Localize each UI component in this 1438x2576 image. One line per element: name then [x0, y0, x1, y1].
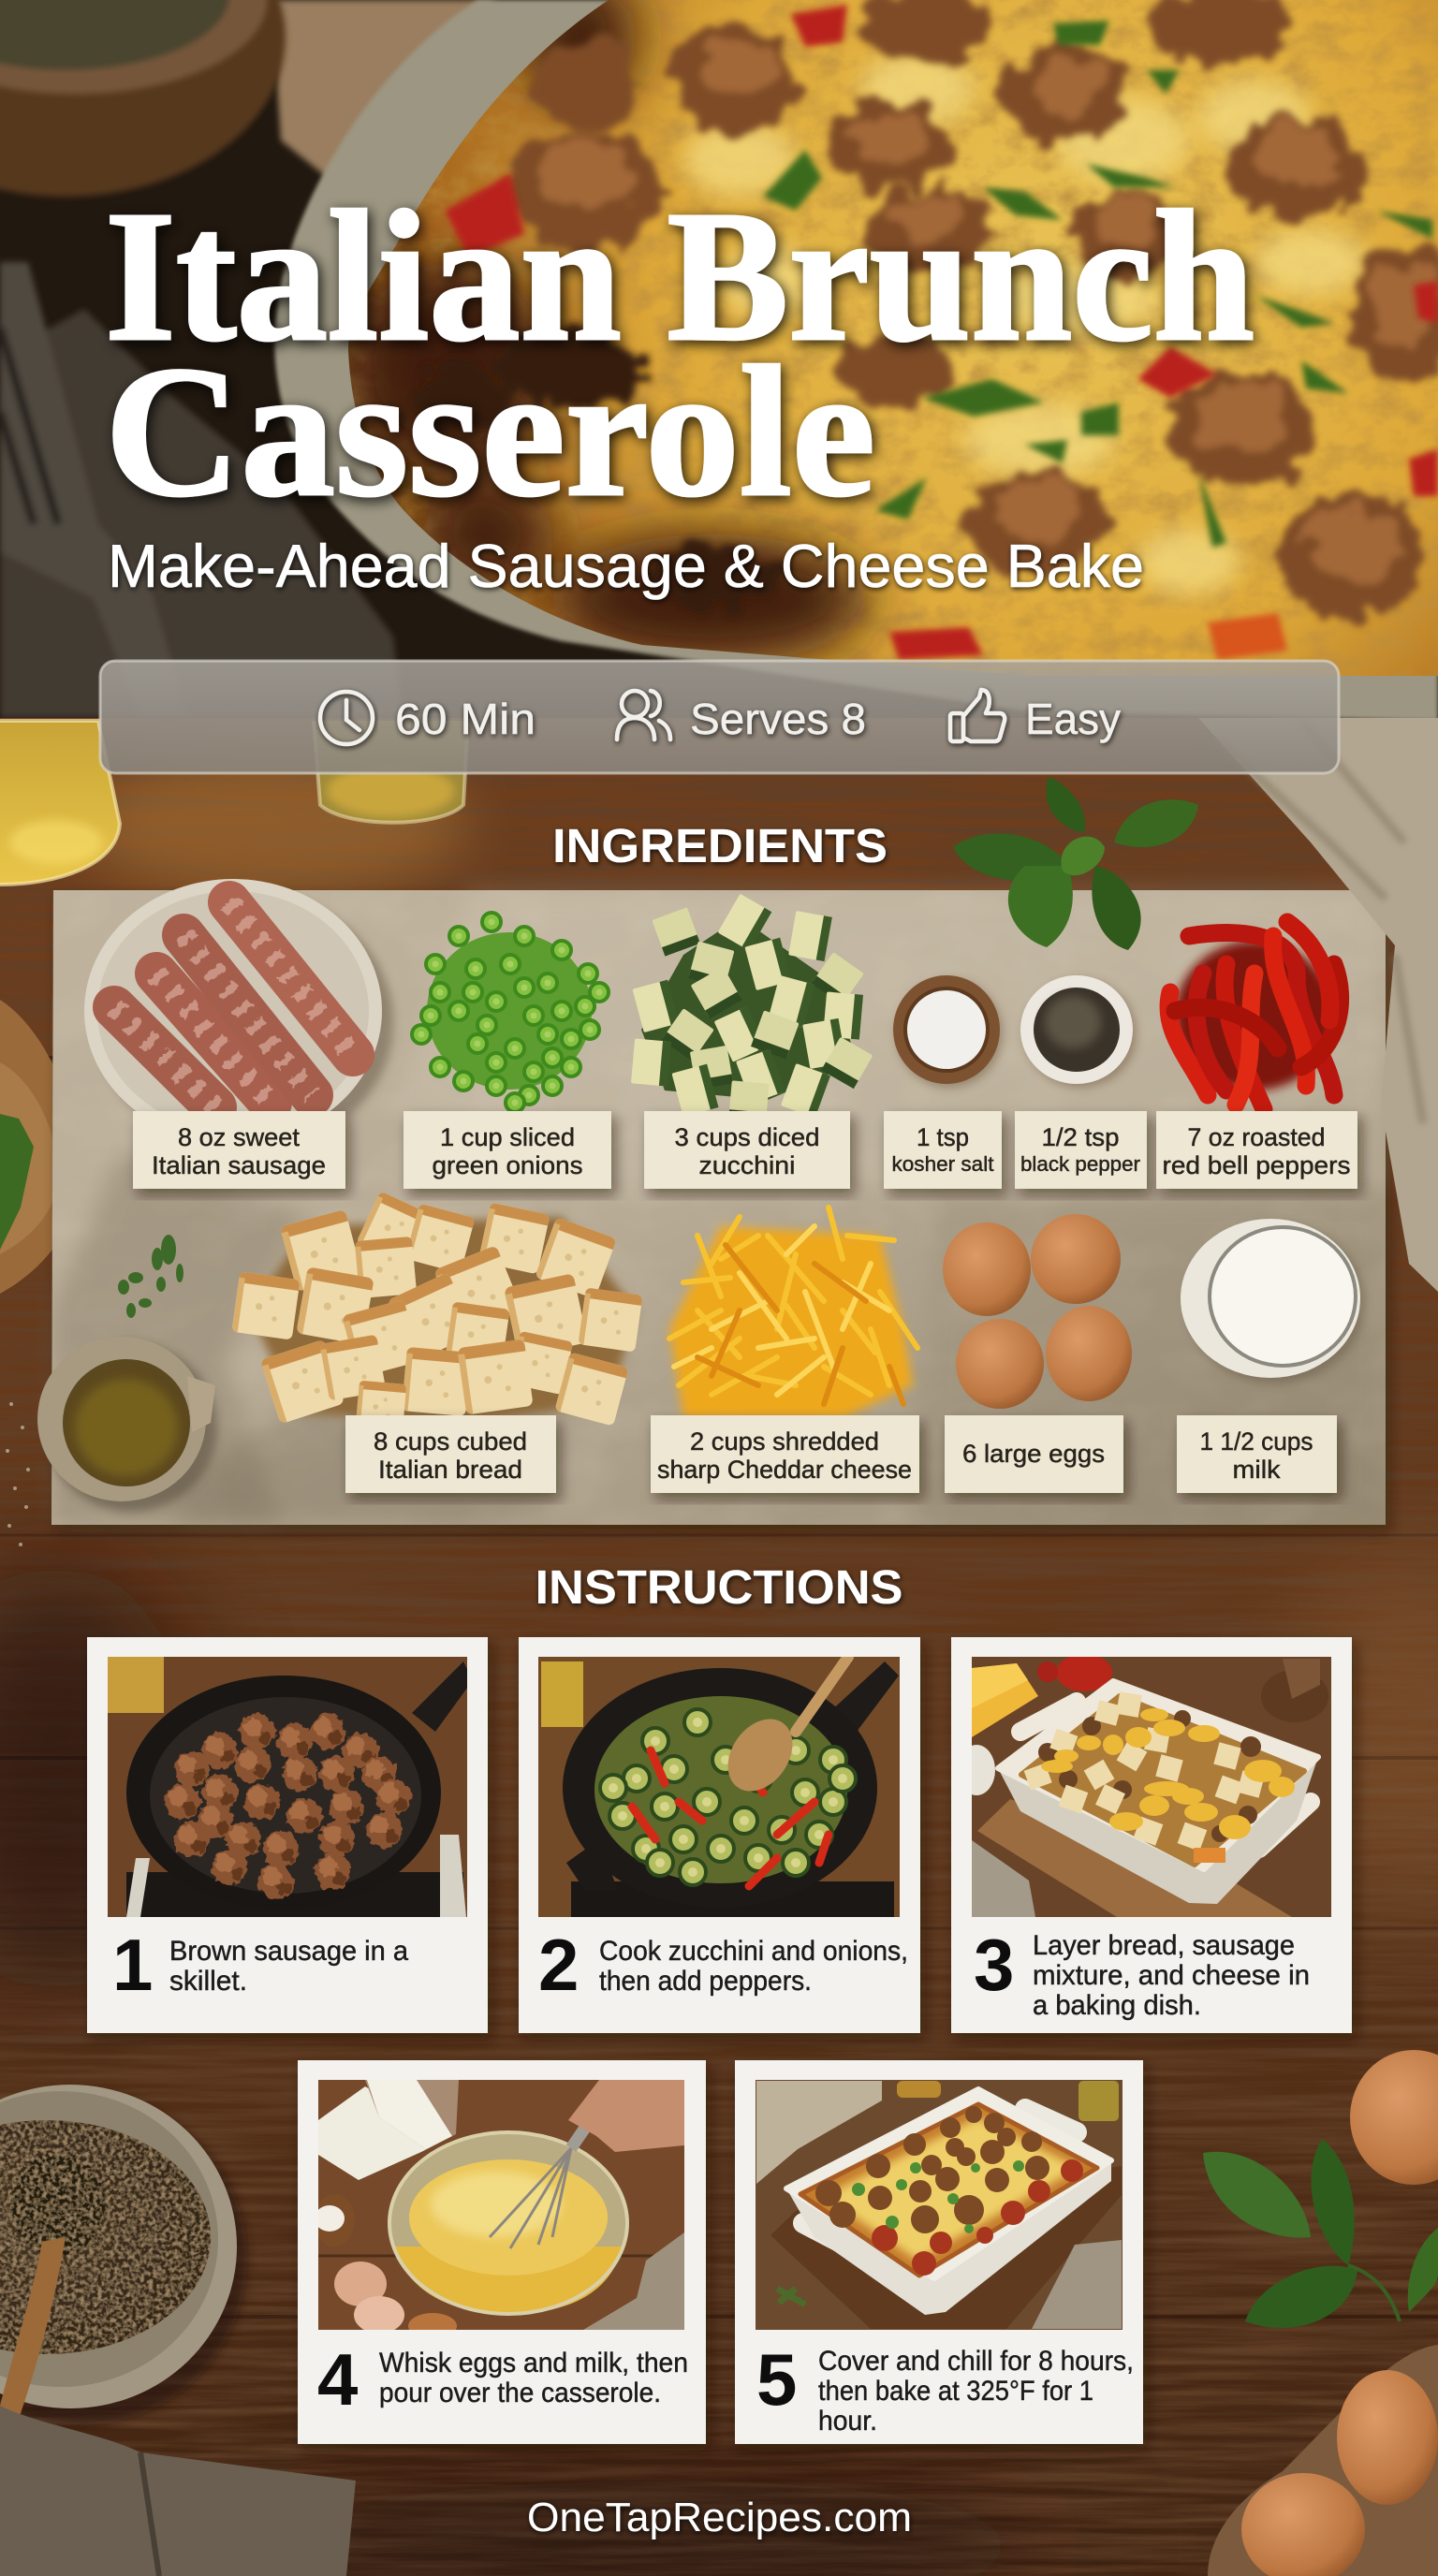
number 5: 5 — [756, 2338, 797, 2421]
step 2 text — [599, 1936, 908, 1997]
label: kosher salt — [884, 1111, 1002, 1189]
step 2 card — [519, 1637, 920, 2033]
ingredient: sausages on plate — [84, 879, 393, 1153]
icon: basil sprig top — [953, 777, 1198, 950]
label: bread: 8 cups cubed — [374, 1427, 527, 1456]
ingredient: diced zucchini — [631, 894, 873, 1122]
label: black pepper — [1015, 1111, 1147, 1189]
ingredient: roasted red peppers — [1168, 922, 1341, 1109]
ingredient: shredded cheddar — [669, 1208, 917, 1418]
ingredient: glass of milk — [1181, 1219, 1365, 1383]
stat: difficulty: Easy — [1025, 695, 1121, 743]
step 1 card — [87, 1637, 488, 2033]
step 3 text: Layer bread, sausage — [1033, 1930, 1295, 1961]
linen cloth right — [1198, 718, 1438, 1292]
decorative seed bowl — [0, 2085, 247, 2471]
icon: wooden bowl — [0, 0, 286, 197]
step 4 text — [379, 2348, 688, 2408]
title: Casserole — [105, 329, 875, 535]
photo: browning sausage — [108, 1657, 473, 1917]
small scattered herbs — [118, 1235, 183, 1318]
label: milk — [1177, 1415, 1337, 1493]
photo: whisking eggs and milk — [314, 2080, 684, 2339]
icon: thumbs up — [950, 690, 1005, 741]
label: zucchini: zucchini — [698, 1151, 796, 1179]
label: black pepper: 1/2 tsp — [1041, 1123, 1120, 1151]
recipe stats bar — [100, 661, 1339, 773]
label: green onions: green onions — [433, 1151, 582, 1179]
step 3 text — [1033, 1930, 1310, 2021]
label: green onions: 1 cup sliced — [440, 1123, 575, 1151]
label: eggs — [945, 1415, 1123, 1493]
ingredient: large eggs — [943, 1214, 1132, 1409]
label: kosher salt: kosher salt — [891, 1152, 994, 1176]
label: bread — [345, 1415, 556, 1493]
wooden bowl at left edge — [0, 1000, 80, 1294]
step 1 text — [169, 1936, 408, 1997]
footer website: OneTapRecipes.com — [527, 2495, 912, 2540]
ingredient: green onions — [412, 913, 609, 1112]
number 4: 4 — [317, 2338, 358, 2421]
step 4 card — [298, 2060, 706, 2444]
heading: ingredients: INGREDIENTS — [552, 819, 888, 872]
label: sausage: 8 oz sweet — [178, 1123, 300, 1151]
photo: layered casserole dish — [958, 1654, 1331, 1917]
label: green onions — [404, 1111, 611, 1189]
subtitle: Make-Ahead Sausage & Cheese Bake — [108, 532, 1144, 600]
ingredient: cubed Italian bread — [231, 1191, 643, 1431]
step 3 text: mixture, and cheese in — [1033, 1960, 1310, 1991]
photo: baked casserole — [756, 2080, 1123, 2330]
olive oil glass left — [0, 721, 120, 885]
step 5 text: then bake at 325°F for 1 — [818, 2376, 1093, 2407]
label: zucchini — [644, 1111, 850, 1189]
label: zucchini: 3 cups diced — [674, 1123, 820, 1151]
icon: wooden spoon — [0, 2153, 105, 2471]
label: milk: 1 1/2 cups — [1200, 1427, 1313, 1456]
step 5 card — [735, 2060, 1143, 2444]
napkin and fork — [0, 262, 403, 718]
number 3: 3 — [974, 1924, 1014, 2006]
step 4 text: Whisk eggs and milk, then — [379, 2348, 688, 2378]
top background wood — [271, 0, 496, 178]
ingredient: pepper bowl — [1020, 975, 1137, 1088]
label: red peppers: red bell peppers — [1163, 1151, 1350, 1179]
icon: clock — [320, 692, 373, 744]
dark shaded corner — [346, 0, 871, 665]
step 4 text: pour over the casserole. — [379, 2378, 661, 2408]
label: red peppers — [1156, 1111, 1357, 1189]
olive oil glass second — [314, 721, 468, 823]
green herbs — [763, 21, 1432, 548]
label: bread: Italian bread — [378, 1456, 522, 1484]
hero photo of casserole — [0, 0, 1438, 721]
step 2 text: Cook zucchini and onions, — [599, 1936, 908, 1967]
glasses below hero — [0, 721, 468, 885]
heading: instructions: INSTRUCTIONS — [536, 1560, 902, 1614]
label: sausage: Italian sausage — [152, 1151, 326, 1179]
section: ingredient mat — [51, 890, 1386, 1525]
title: Italian Brunch — [105, 173, 1255, 380]
pale cheese highlights — [683, 51, 1367, 594]
casserole filling — [348, 0, 1438, 676]
number 1: 1 — [112, 1924, 153, 2006]
ingredient: broth cup — [37, 1337, 217, 1512]
step 3 card — [951, 1637, 1352, 2033]
step 3 text: a baking dish. — [1033, 1990, 1201, 2021]
coarse salt speckles — [6, 1402, 30, 1546]
step 5 text: hour. — [818, 2406, 877, 2437]
decorative egg right — [1350, 2050, 1438, 2185]
step 5 text — [818, 2346, 1134, 2437]
label: cheddar: sharp Cheddar cheese — [657, 1456, 912, 1484]
stat: servings: Serves 8 — [690, 695, 866, 743]
label: red peppers: 7 oz roasted — [1187, 1123, 1326, 1151]
decorative napkin bottom left — [0, 2406, 356, 2576]
ingredient labels — [133, 1111, 1357, 1493]
stat: time: 60 Min — [395, 695, 536, 743]
step 2 text: then add peppers. — [599, 1966, 812, 1997]
label: sausage — [133, 1111, 345, 1189]
label: cheddar — [651, 1415, 919, 1493]
photo: zucchini and peppers in skillet — [538, 1657, 900, 1917]
ingredient: salt bowl — [893, 975, 1003, 1088]
step 5 text: Cover and chill for 8 hours, — [818, 2346, 1134, 2377]
decorative egg carton — [1208, 2345, 1438, 2576]
step 1 text: skillet. — [169, 1966, 247, 1997]
label: black pepper: black pepper — [1020, 1152, 1140, 1176]
label: eggs: 6 large eggs — [962, 1440, 1105, 1468]
number 2: 2 — [538, 1924, 579, 2006]
label: kosher salt: 1 tsp — [917, 1123, 969, 1151]
icon: people — [617, 691, 670, 739]
label: milk: milk — [1232, 1456, 1281, 1484]
step 1 text: Brown sausage in a — [169, 1936, 408, 1967]
baking dish rim — [274, 0, 1438, 721]
title — [105, 173, 1255, 535]
red peppers — [445, 5, 1438, 660]
decorative basil right — [1203, 2139, 1438, 2328]
sausage crumbles — [407, 0, 1438, 619]
label: cheddar: 2 cups shredded — [690, 1427, 879, 1456]
